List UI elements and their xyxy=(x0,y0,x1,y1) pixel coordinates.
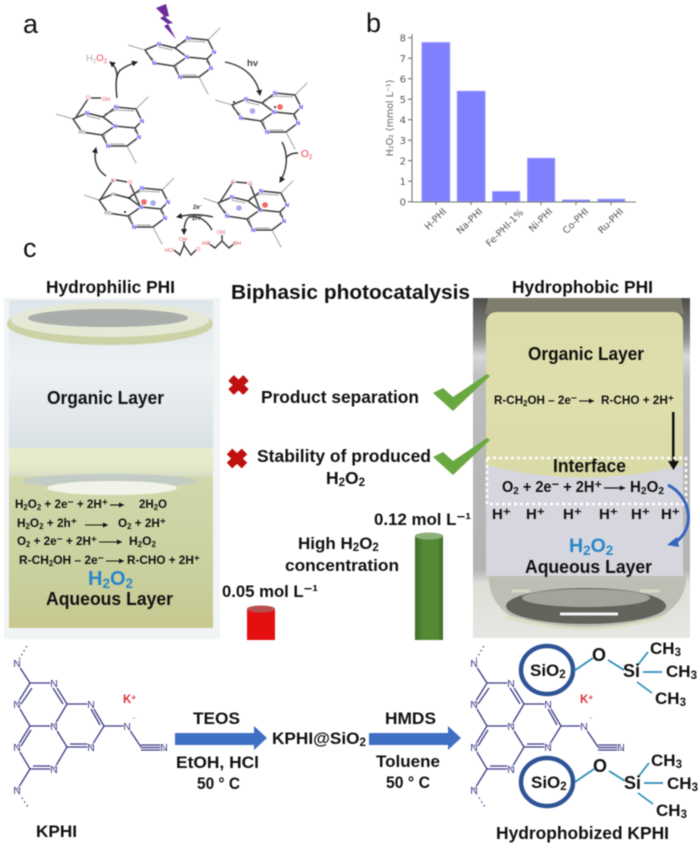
molecule: KPHI xyxy=(13,644,168,807)
y tick labels: 6 xyxy=(400,74,406,86)
equation 1: O xyxy=(158,497,167,511)
molecule: hydrophobized KPHI core: N xyxy=(544,742,552,754)
molecule: reduced peroxo PHI left: HN xyxy=(104,211,112,217)
text: 50 C: 50 ° C xyxy=(197,774,240,793)
arrow: H2O2 migration xyxy=(667,485,688,547)
silica group upper: 3 xyxy=(680,697,686,709)
molecule: KPHI: N xyxy=(13,658,21,670)
proton row: H⁺ xyxy=(526,506,545,523)
molecule: top PHI: N xyxy=(157,42,161,48)
icon: purple lightning bolt xyxy=(156,4,176,39)
silica group lower: 3 xyxy=(692,782,698,794)
text: High H2O2 concentration: 2 xyxy=(353,542,359,554)
molecule: KPHI: N xyxy=(13,785,21,797)
peroxo bridge left: O xyxy=(128,180,133,186)
label: H2O2: O xyxy=(110,568,126,590)
equation 2: 2 xyxy=(26,522,30,531)
molecule: hydrophobized KPHI core: N xyxy=(470,699,478,711)
molecule: reduced peroxo PHI left: H xyxy=(111,192,115,198)
interface equation: H xyxy=(630,479,641,496)
arrow: TEOS step xyxy=(175,726,267,750)
x tick labels: Fe-PHI-1% xyxy=(484,207,526,249)
molecule: excited PHI: N xyxy=(272,110,276,116)
molecule: hydrophobized KPHI core: + xyxy=(588,693,593,702)
dotted interface box xyxy=(487,458,686,504)
label: H2O2: H xyxy=(86,53,93,64)
green check 1 xyxy=(433,374,490,411)
molecule: hydrophobized KPHI core: − xyxy=(589,716,593,722)
molecule: reduced peroxo PHI left: N xyxy=(163,216,167,222)
molecule: excited PHI: N xyxy=(265,130,269,136)
silica group upper: O xyxy=(592,645,606,665)
text: High H2O2 concentration: 2 xyxy=(372,542,379,554)
molecule: hydrophobized KPHI core: K xyxy=(580,694,588,706)
glycerol and oxidised product: HO xyxy=(202,241,211,247)
molecule: reduced peroxo PHI left xyxy=(84,178,174,244)
molecule: hydrophobized KPHI core: N xyxy=(507,721,515,733)
text: HMDS: HMDS xyxy=(385,709,436,728)
arrow: glycerol conversion xyxy=(184,217,212,234)
equation 2: O xyxy=(118,516,127,530)
interface equation: O xyxy=(647,479,658,496)
equation 4: R-CH xyxy=(19,553,49,567)
molecule: hydroperoxide PHI: N xyxy=(113,124,117,130)
molecule: hydrophobized KPHI core: N xyxy=(544,699,552,711)
molecule: hydroperoxide PHI: N xyxy=(106,144,110,150)
equation 1: + 2e⁻ + 2H⁺ xyxy=(41,497,108,511)
molecule: peroxo PHI right: N xyxy=(282,219,286,225)
arrow: HMDS step xyxy=(369,726,461,750)
molecule: reduced peroxo PHI left: N xyxy=(132,225,136,231)
icon: red cross 1 xyxy=(231,378,246,392)
equation 1: H xyxy=(15,497,24,511)
silica group lower: 3 xyxy=(681,809,687,821)
organic equation: R-CHO + 2H⁺ xyxy=(601,393,674,407)
molecule: hydroperoxide PHI: HN xyxy=(78,130,86,136)
molecule: hydroperoxide PHI: N xyxy=(137,135,141,141)
interface equation: 2 xyxy=(513,485,519,497)
equation 4: OH – 2e⁻ xyxy=(53,553,104,567)
molecule: hydrophobized KPHI core: N xyxy=(470,742,478,754)
proton row: H⁺ xyxy=(599,506,618,523)
photo background xyxy=(4,298,220,639)
equation 2: H xyxy=(17,516,26,530)
molecule: peroxo PHI right: N xyxy=(285,203,289,209)
molecule: excited PHI xyxy=(215,83,307,149)
text: Product separation: Product separation xyxy=(261,387,419,407)
equation 3 xyxy=(17,534,157,549)
peroxo bridge left xyxy=(100,178,156,213)
label: Hydrophobized KPHI: Hydrophobized KPHI xyxy=(496,823,669,843)
molecule: top PHI: N xyxy=(212,50,216,56)
molecule: hydroperoxide PHI: N xyxy=(85,111,89,117)
y tick labels: 2 xyxy=(400,156,406,168)
text: Stability of produced H2O2: 2 xyxy=(359,477,365,489)
proton row: H⁺ xyxy=(563,506,582,523)
vial neck xyxy=(485,298,684,314)
glycerol and oxidised product: OH xyxy=(179,237,187,243)
label: O2: 2 xyxy=(309,154,313,161)
molecule: KPHI: N xyxy=(87,699,95,711)
text: 0.12 mol/L: 0.12 mol L⁻¹ xyxy=(374,511,471,529)
glycerol and oxidised product xyxy=(165,230,241,255)
equation 3: H xyxy=(129,534,138,548)
arrow: hv xyxy=(225,62,260,95)
label: 2e- 2H+: 2e xyxy=(193,205,200,211)
proton row: H⁺ xyxy=(492,506,511,523)
label: Interface: Interface xyxy=(553,456,626,476)
silica group lower: SiO xyxy=(531,773,560,792)
axes and ticks xyxy=(408,34,636,205)
text: Stability of produced H2O2: 2 xyxy=(339,477,345,489)
organic equation: 2 xyxy=(523,399,528,408)
equation 4 xyxy=(19,553,200,568)
text: KPHI@SiO2: 2 xyxy=(360,737,366,749)
silica group lower: 2 xyxy=(560,781,567,793)
silica group lower: 3 xyxy=(676,759,682,771)
molecule: KPHI: N xyxy=(50,721,58,733)
heading: Hydrophobic PHI: Hydrophobic PHI xyxy=(512,277,653,297)
text: Stability of produced H2O2: H xyxy=(326,468,339,488)
molecule: reduced peroxo PHI left: N xyxy=(139,205,143,211)
molecule: KPHI: N xyxy=(123,721,131,733)
label: H2O2: H xyxy=(569,535,583,557)
silica group upper: 3 xyxy=(691,670,697,682)
x tick labels: Ni-PHI xyxy=(527,206,555,235)
panel a: photocatalytic cycle xyxy=(56,4,313,255)
molecule: top PHI: N xyxy=(186,36,190,42)
molecule: KPHI: K xyxy=(123,694,131,706)
glycerol and oxidised product: OH xyxy=(217,230,225,236)
molecule: top PHI: N xyxy=(185,55,189,61)
y tick labels: 5 xyxy=(400,95,406,106)
cylinder: green xyxy=(415,532,443,640)
equation 2: 2 xyxy=(39,522,44,531)
text: Stability of produced H2O2 xyxy=(257,446,431,489)
silica group lower: Si xyxy=(624,773,641,793)
molecule: hydrophobized KPHI core: N xyxy=(507,678,515,690)
molecule: KPHI: N xyxy=(13,742,21,754)
equation 4: 2 xyxy=(49,559,54,568)
proton row: H⁺ xyxy=(631,506,650,523)
panel: hydrophobic vial photo xyxy=(433,298,690,638)
peroxo bridge left: O xyxy=(111,178,116,184)
y tick labels: 1 xyxy=(400,177,406,188)
equation 1: 2 xyxy=(23,503,28,512)
label: H2O2: 2 xyxy=(583,543,591,558)
molecule: reduced peroxo PHI left: N xyxy=(140,186,144,192)
label: Organic Layer: Organic Layer xyxy=(47,387,164,408)
silica group lower: CH xyxy=(651,751,676,770)
bars xyxy=(422,42,625,202)
glycerol and oxidised product: O xyxy=(196,247,201,253)
text: KPHI@SiO2: KPHI@SiO xyxy=(272,729,358,748)
panel b: bar chart xyxy=(385,34,636,249)
peroxo bridge right xyxy=(220,180,268,211)
panel label b: b xyxy=(366,8,381,38)
label: Aqueous Layer: Aqueous Layer xyxy=(525,557,652,577)
text: High H2O2 concentration: O xyxy=(359,534,372,553)
photo background xyxy=(473,298,690,638)
molecule: peroxo PHI right xyxy=(203,181,293,247)
aqueous liquid xyxy=(9,476,213,628)
equation 4: R-CHO + 2H⁺ xyxy=(127,553,200,567)
silica group lower xyxy=(521,751,698,821)
peroxo bridge right: O xyxy=(248,182,253,188)
interface equation: O xyxy=(502,479,514,496)
molecule: hydroperoxide PHI: N xyxy=(114,105,118,111)
hydroperoxide group xyxy=(76,96,110,117)
arrow: cycle lower left xyxy=(95,148,106,176)
equation 2: O xyxy=(30,516,39,530)
molecule: hydrophobized KPHI core: N xyxy=(580,721,588,733)
equation 2: 2 xyxy=(127,522,132,531)
equation 3: 2 xyxy=(152,540,157,549)
green check 2 xyxy=(433,438,490,475)
silica group upper: SiO xyxy=(530,661,559,680)
text: EtOH, HCl: EtOH, HCl xyxy=(176,753,259,772)
text: High H2O2 concentration: High H xyxy=(298,534,353,553)
pale interface band xyxy=(9,448,213,477)
equation 1 xyxy=(15,497,167,512)
molecule: top PHI xyxy=(128,28,220,94)
label: hv: hv xyxy=(247,58,259,69)
label: 2H+: 2H xyxy=(192,216,200,222)
molecule: top PHI: N xyxy=(178,75,182,81)
proton row xyxy=(492,506,680,523)
panel label c: c xyxy=(23,233,36,263)
silica group upper: Si xyxy=(623,661,640,681)
arrow: oxygen uptake xyxy=(280,142,286,182)
interface equation: 2 xyxy=(658,485,664,497)
text: High H2O2 concentration xyxy=(285,534,399,575)
equation 1: 2 xyxy=(37,503,42,512)
organic equation: R-CH xyxy=(494,393,524,407)
equation 3: + 2e⁻ + 2H⁺ xyxy=(30,534,97,548)
molecule: peroxo PHI right: N xyxy=(230,195,234,201)
glycerol and oxidised product: OH xyxy=(233,241,241,247)
silica group upper xyxy=(521,639,697,709)
molecule: reduced peroxo PHI left: N xyxy=(166,200,170,206)
label: H2O2: H xyxy=(88,568,102,590)
label: H2O2: 2 xyxy=(104,59,108,65)
label: H2O2: O xyxy=(96,53,104,64)
proton row: H⁺ xyxy=(661,506,680,523)
label: H2O2: O xyxy=(591,535,606,557)
molecule: top PHI: N xyxy=(152,61,156,67)
x tick labels: Co-PHI xyxy=(561,206,591,237)
molecule: hydrophobized KPHI core: N xyxy=(470,658,478,670)
aqueous layer xyxy=(486,460,683,576)
charge markers on excited PHI xyxy=(233,101,283,114)
molecule: peroxo PHI right: N xyxy=(258,208,262,214)
y axis label: H₂O₂ (mmol L⁻¹) xyxy=(385,80,396,156)
text: TEOS: TEOS xyxy=(193,709,240,728)
label: Organic Layer: Organic Layer xyxy=(528,343,644,364)
molecule: KPHI: N xyxy=(13,699,21,711)
yellow organic layer xyxy=(486,312,683,478)
silica group lower: O xyxy=(593,756,607,776)
vial rim xyxy=(7,303,213,345)
silica group upper: 3 xyxy=(675,647,681,659)
hydroperoxide group: OH xyxy=(102,97,110,103)
heading: Hydrophilic PHI: Hydrophilic PHI xyxy=(46,277,175,297)
text: 50 C: 50 ° C xyxy=(386,773,430,792)
molecule: hydroperoxide PHI xyxy=(56,97,148,163)
cylinder: red xyxy=(247,606,275,640)
interface equation xyxy=(502,479,664,497)
y tick labels: 7 xyxy=(400,54,406,65)
equation 2 xyxy=(17,516,166,531)
x tick labels: Ru-PHI xyxy=(596,206,626,236)
silica group lower: CH xyxy=(656,801,681,820)
molecule: KPHI: − xyxy=(132,716,136,722)
molecule: hydrophobized KPHI core: N xyxy=(470,785,478,797)
interface equation: + 2e⁻ + 2H⁺ xyxy=(519,479,602,496)
silica group upper: 2 xyxy=(559,669,566,681)
icon: red cross 2 xyxy=(230,452,244,466)
arrow: bottom electron transfer xyxy=(177,215,213,217)
organic equation: OH – 2e⁻ xyxy=(527,393,577,407)
text: Toluene: Toluene xyxy=(376,753,440,771)
silica group upper: CH xyxy=(655,689,680,708)
equation 1: 2H xyxy=(139,497,154,511)
label: Aqueous Layer: Aqueous Layer xyxy=(46,589,173,609)
hydroperoxide group: O xyxy=(86,96,91,102)
molecule: KPHI: N xyxy=(50,764,58,776)
y tick labels xyxy=(400,34,406,208)
arrow: H2O2 release right xyxy=(116,62,137,98)
arrow: H2O2 release left xyxy=(110,62,117,78)
molecule: hydrophobized KPHI core: N xyxy=(617,742,625,754)
silica group lower: CH xyxy=(667,774,692,793)
label: KPHI: KPHI xyxy=(36,822,77,841)
text: High H2O2 concentration: concentration xyxy=(285,556,399,575)
label: 2e- 2H+: − xyxy=(200,203,203,208)
y tick labels: 8 xyxy=(400,34,406,44)
glass base xyxy=(489,576,686,628)
equation 2: + 2H⁺ xyxy=(131,516,166,530)
silica group upper: CH xyxy=(666,662,691,681)
glass body xyxy=(9,300,213,450)
equation 2: + 2h⁺ xyxy=(44,516,77,530)
x tick labels: Na-PHI xyxy=(455,206,485,237)
panel label a: a xyxy=(23,9,39,39)
molecule: KPHI: N xyxy=(50,678,58,690)
equation 3: O xyxy=(17,534,26,548)
label: H2O2: 2 xyxy=(93,59,97,65)
y tick labels: 4 xyxy=(400,116,406,126)
molecule: excited PHI: N xyxy=(244,97,248,103)
molecule: excited PHI: N xyxy=(273,91,277,97)
text: Stability of produced H2O2: O xyxy=(345,468,359,488)
molecule: excited PHI: N xyxy=(239,116,243,122)
molecule: peroxo PHI right: N xyxy=(259,189,263,195)
label: H2O2: 2 xyxy=(606,543,613,558)
arrow branch: oxygen xyxy=(286,153,298,158)
text: 0.05 mol/L: 0.05 mol L⁻¹ xyxy=(222,583,318,601)
molecule: top PHI: N xyxy=(209,66,213,72)
molecule: hydrophobized KPHI core: N xyxy=(507,764,515,776)
label: 2H+: + xyxy=(200,214,203,219)
label: O2: O xyxy=(301,149,309,160)
interface equation: 2 xyxy=(641,485,647,497)
molecule: peroxo PHI right: N xyxy=(225,214,229,220)
molecule: excited PHI: N xyxy=(299,105,303,111)
peroxo bridge right: O xyxy=(231,180,236,186)
molecule: hydroperoxide PHI: N xyxy=(140,119,144,125)
molecule: KPHI: + xyxy=(131,693,136,702)
panel: hydrophilic vial photo xyxy=(4,298,220,639)
label: H2O2: 2 xyxy=(102,576,110,591)
x tick labels xyxy=(423,206,626,249)
molecule: KPHI: N xyxy=(87,742,95,754)
x tick labels: H-PHI xyxy=(423,206,449,233)
text: Stability of produced H2O2: Stability of produced xyxy=(257,446,431,466)
equation 3: 2 xyxy=(138,540,143,549)
meniscus xyxy=(22,474,198,495)
equation 1: O xyxy=(28,497,37,511)
equation 3: O xyxy=(142,534,152,548)
molecule: hydrophobized KPHI core xyxy=(470,644,625,807)
equation 3: 2 xyxy=(26,540,31,549)
equation 1: 2 xyxy=(154,503,159,512)
glycerol and oxidised product: HO xyxy=(165,248,174,254)
silica group upper: CH xyxy=(650,639,675,658)
organic equation xyxy=(494,393,674,408)
heading: Biphasic photocatalysis: Biphasic photocatalysis xyxy=(231,281,470,304)
label: H2O2: 2 xyxy=(126,576,133,591)
arrow: down to interface xyxy=(668,412,679,470)
y tick labels: 3 xyxy=(400,136,406,147)
molecule: KPHI: N xyxy=(160,742,168,754)
y tick labels: 0 xyxy=(400,198,406,208)
molecule: excited PHI: N xyxy=(296,121,300,127)
molecule: peroxo PHI right: N xyxy=(251,228,255,234)
